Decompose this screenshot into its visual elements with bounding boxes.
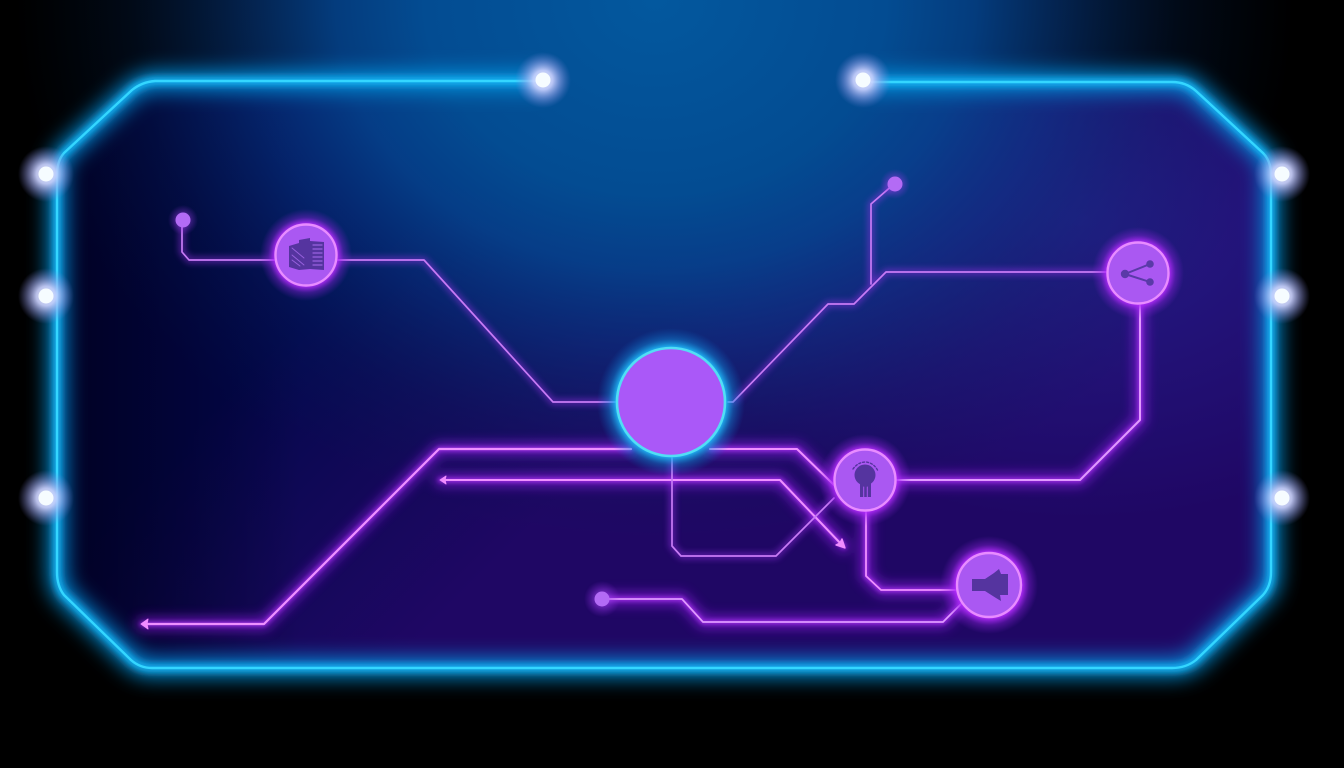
arrow: hub to lower left <box>141 449 631 629</box>
connector: hub to share node <box>728 184 1108 402</box>
connector: start node to megaphone node <box>602 599 961 622</box>
icon: document <box>289 238 324 270</box>
panel neon border <box>57 81 1271 668</box>
small terminal nodes <box>168 169 910 617</box>
connector: hub to bulb node <box>710 449 834 485</box>
connector: document node to hub <box>182 220 615 402</box>
icon: megaphone <box>972 569 1008 601</box>
node: share icon <box>1092 227 1184 319</box>
connector: share node to bulb node <box>896 303 1140 480</box>
circuit lines: thin glow <box>182 184 1108 556</box>
border end nodes <box>18 52 1310 526</box>
icon: share <box>1121 260 1154 286</box>
panel fill <box>57 82 1271 668</box>
arrow: mid line <box>440 476 845 548</box>
node: document icon <box>260 209 352 301</box>
icon: lightbulb <box>853 462 878 497</box>
node: lightbulb icon <box>819 434 911 526</box>
connector: bulb node to megaphone node <box>866 511 958 590</box>
circuit lines: bright glow <box>142 303 1140 624</box>
connector: hub down to bulb node <box>672 458 834 556</box>
central hub <box>597 328 745 476</box>
node: megaphone icon <box>940 536 1038 634</box>
